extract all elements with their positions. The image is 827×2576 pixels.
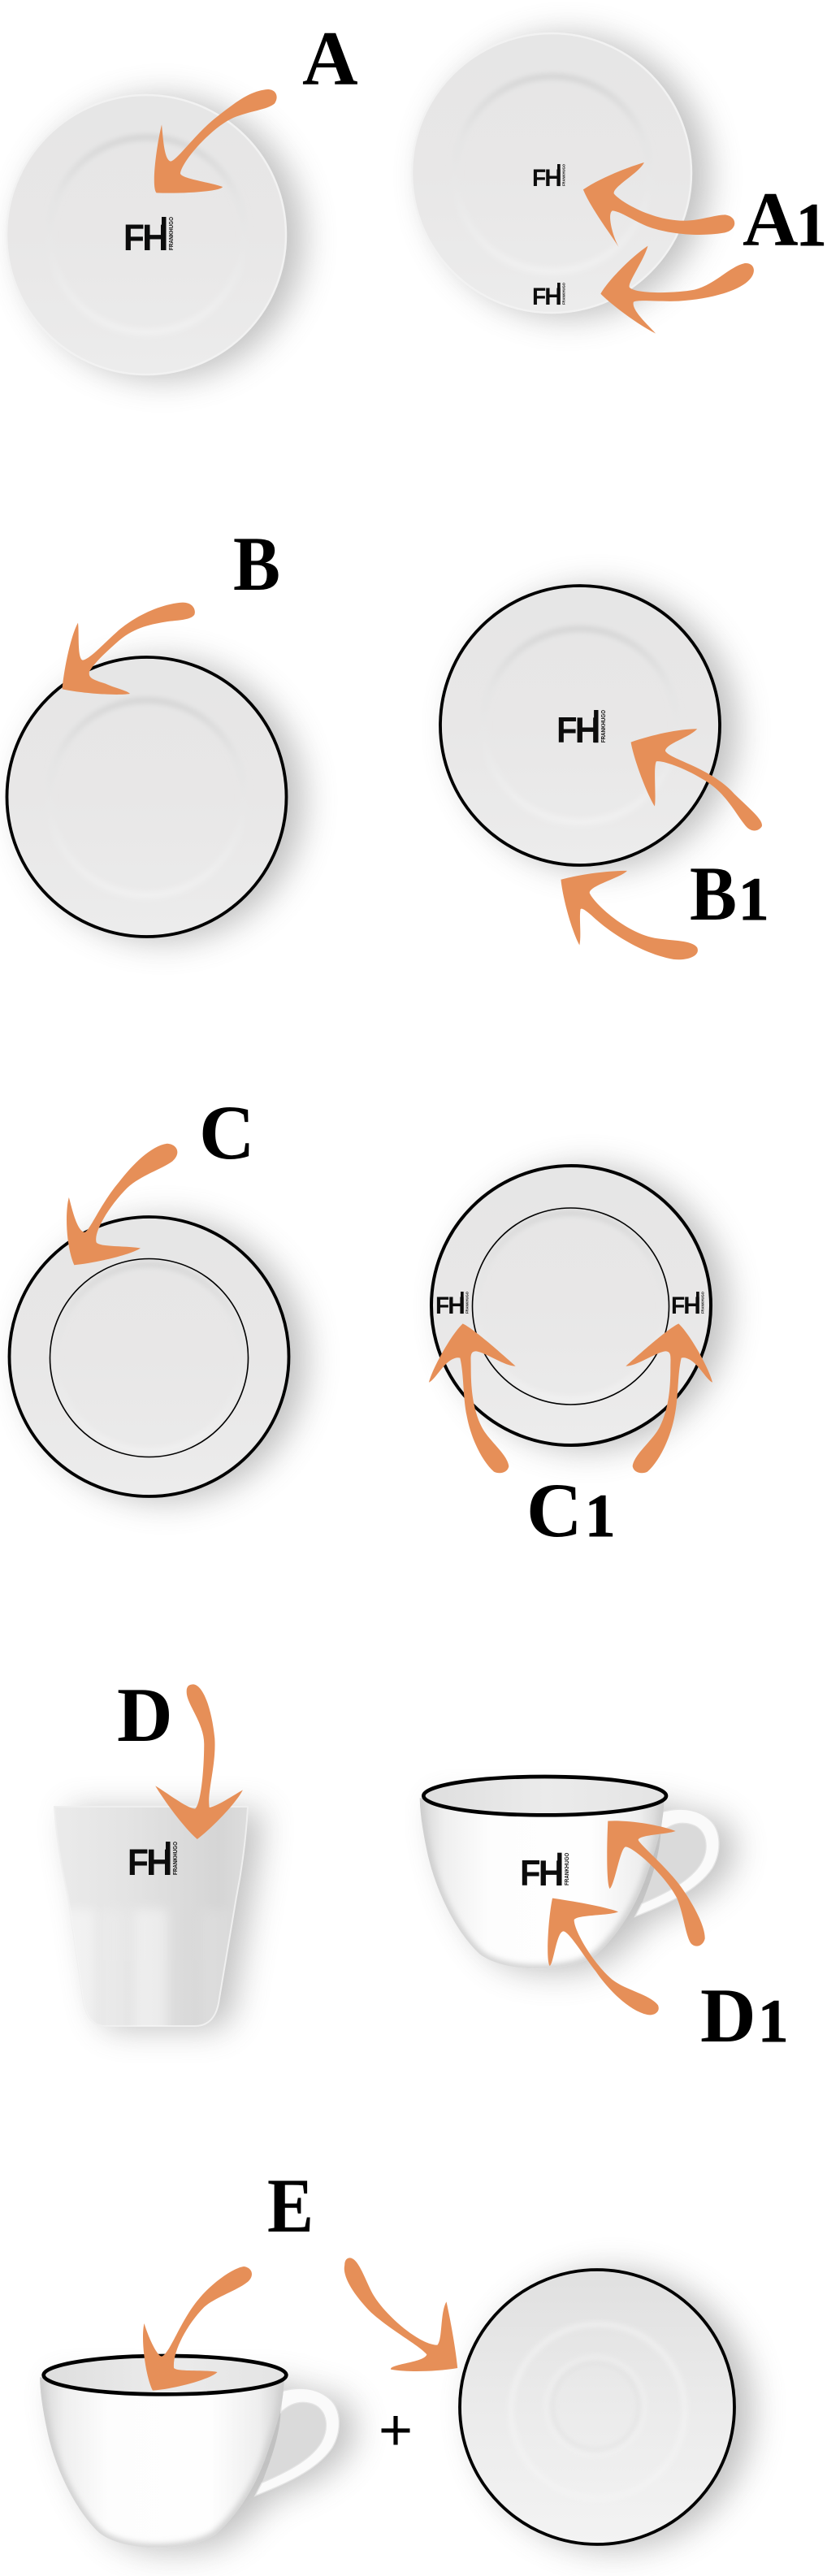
logo: plate C1 left: F [435, 1292, 449, 1319]
label A1: 1 [796, 192, 827, 259]
logo: plate A1 centre: H [544, 165, 562, 192]
logo: tumbler [128, 1842, 179, 1883]
logo: plate C1 right: H [683, 1292, 701, 1319]
logo: cup D1: FRANKHUGO [563, 1852, 570, 1885]
label C1 [526, 1467, 616, 1553]
label B1: B [690, 851, 737, 937]
label A1 [743, 176, 827, 262]
logo: plate A: FRANKHUGO [167, 217, 175, 250]
arrow: C1 right [626, 1323, 712, 1473]
arrow: E to cup [143, 2266, 252, 2391]
fluted tumbler with logo [54, 1807, 262, 2047]
logo: plate C1 left [435, 1292, 470, 1319]
label D1: D [700, 1972, 756, 2059]
arrow: A [154, 89, 277, 193]
plate A1 with two logos [412, 33, 709, 318]
logo: tumbler: FRANKHUGO [171, 1842, 179, 1875]
arrow: B1 outside [561, 871, 698, 959]
logo: plate C1 left: FRANKHUGO [465, 1292, 470, 1314]
plate C1 with rim, inner line and logos [431, 1166, 729, 1450]
logo: plate A1 centre: FRANKHUGO [561, 164, 566, 186]
label A: A [302, 15, 358, 102]
label C1: C [526, 1467, 582, 1553]
logo: plate A1 centre [532, 164, 566, 192]
arrow: B [63, 603, 195, 695]
arrow: D1 upper [607, 1821, 705, 1946]
plate C with rim and inner line [10, 1217, 307, 1501]
arrow: D1 lower [548, 1898, 659, 2015]
logo: tumbler: H [146, 1842, 172, 1883]
logo: plate B1: F [556, 711, 578, 751]
label B1: 1 [738, 866, 769, 933]
logo: plate A: H [142, 217, 169, 258]
logo: plate A1 centre: F [532, 165, 546, 192]
label C1: 1 [585, 1483, 616, 1550]
logo: plate C1 left: H [448, 1292, 465, 1319]
cup D1 with rim, handle and logo [420, 1777, 735, 1972]
plate B1 with black rim and logo [440, 586, 738, 870]
label D: D [117, 1672, 173, 1758]
label A1: A [743, 176, 799, 262]
arrow: E to saucer [344, 2258, 457, 2371]
logo: plate A1 rim: F [532, 284, 546, 310]
label E: E [267, 2163, 314, 2249]
plate B with black rim [6, 657, 304, 942]
logo: cup D1: F [520, 1854, 541, 1894]
logo: cup D1: H [539, 1854, 564, 1894]
logo: plate A: F [123, 218, 145, 258]
logo: plate B1: FRANKHUGO [600, 710, 607, 742]
arrow: D [155, 1684, 243, 1839]
logo: plate A1 rim [532, 283, 566, 310]
saucer E with black rim [460, 2270, 753, 2550]
arrow: C [67, 1144, 177, 1265]
plus sign: + [379, 2398, 413, 2463]
logo: plate C1 right: F [671, 1292, 685, 1319]
logo: plate C1 right: FRANKHUGO [700, 1292, 705, 1314]
logo: plate A1 rim: H [544, 284, 562, 310]
label B1 [690, 851, 769, 937]
logo: plate B1: H [575, 711, 600, 751]
arrow: A1 centre [583, 162, 734, 247]
logo: plate C1 right [671, 1292, 705, 1319]
logo: plate A [123, 217, 175, 258]
logo: tumbler: F [128, 1842, 149, 1883]
arrow: C1 left [429, 1323, 516, 1473]
logo: plate B1 [556, 710, 607, 751]
arrow: A1 rim [600, 246, 754, 334]
plate A with logo [6, 95, 304, 379]
logo: cup D1 [520, 1852, 570, 1894]
cup E with black rim [40, 2356, 355, 2552]
logo: plate A1 rim: FRANKHUGO [561, 283, 566, 305]
label D1: 1 [758, 1988, 788, 2055]
arrow: B1 centre [631, 729, 762, 831]
label D1 [700, 1972, 788, 2059]
label B: B [233, 521, 280, 607]
label C: C [199, 1089, 255, 1175]
